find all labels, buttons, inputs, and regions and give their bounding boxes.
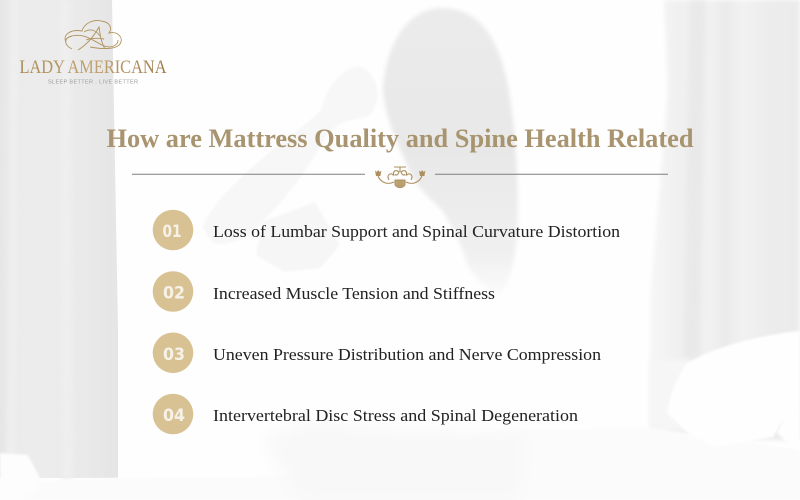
number badge: 04 (163, 406, 185, 426)
number badge (153, 271, 193, 312)
list item 02 (152, 271, 495, 312)
list item 01 (152, 210, 621, 250)
hand near shoulder (256, 202, 340, 272)
ornamental divider (132, 166, 668, 188)
ornament (375, 167, 425, 188)
number badge: 01 (162, 222, 182, 242)
list item 04 (152, 394, 579, 434)
item text: Uneven Pressure Distribution and Nerve Compression (213, 345, 602, 364)
item text: Increased Muscle Tension and Stiffness (213, 284, 495, 303)
number badge: 03 (163, 345, 185, 365)
item text: Loss of Lumbar Support and Spinal Curvature Distortion (213, 222, 621, 241)
tagline: SLEEP BETTER . LIVE BETTER (48, 80, 138, 86)
number badge (153, 210, 193, 250)
wordmark: LADY AMERICANA (20, 57, 167, 78)
list item 03 (152, 332, 602, 374)
item text: Intervertebral Disc Stress and Spinal Degeneration (213, 406, 579, 425)
logo: Lady Americana (20, 20, 167, 86)
number badge (153, 394, 193, 434)
raised arm (203, 66, 378, 244)
hair (383, 8, 518, 296)
number badge: 02 (163, 284, 185, 304)
number badge (153, 332, 193, 373)
title: How are Mattress Quality and Spine Health Related (106, 124, 694, 153)
logo emblem (65, 20, 121, 50)
bed and pillows (0, 331, 800, 500)
